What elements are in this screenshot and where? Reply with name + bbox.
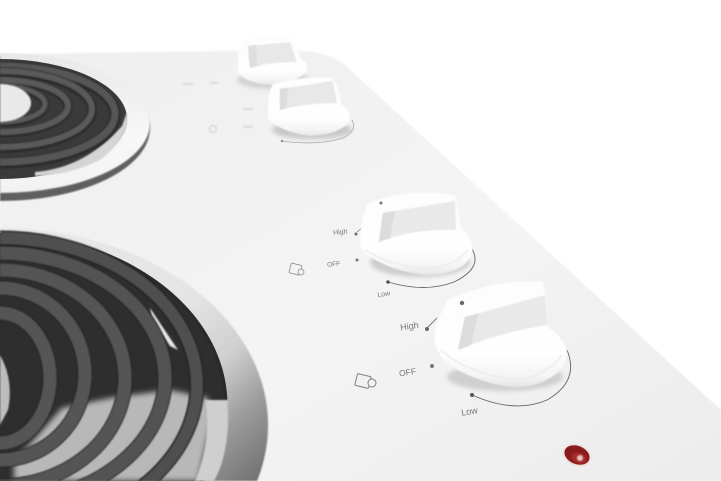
icon: [355, 373, 376, 389]
dial: High / OFF / Low knob 4: [355, 281, 571, 418]
dial: High / OFF / Low knob 4: OFF: [398, 366, 417, 378]
burner: rear left coil: [0, 53, 150, 201]
rear burner chrome ring: [0, 55, 150, 201]
front burner chrome ring: [0, 228, 268, 481]
dial: High / OFF / Low knob 3: Low: [377, 290, 392, 299]
burner: front left coil: [0, 228, 268, 481]
knob body: [447, 363, 563, 391]
knob body: [370, 247, 470, 277]
power indicator light: [560, 440, 594, 470]
dial 3 arc: [388, 249, 475, 288]
rear burner coils: [0, 66, 115, 163]
front burner coils: [0, 230, 204, 481]
front burner well: [0, 233, 227, 481]
icon: [289, 263, 304, 275]
faint rear controls and icon: [183, 82, 253, 132]
rear burner well: [0, 59, 127, 179]
dial: rear knob 2: [268, 78, 354, 143]
front burner centre hub: [0, 355, 10, 425]
rear burner centre disc: [0, 84, 31, 122]
dial: High / OFF / Low knob 3: [289, 193, 475, 299]
dial: High / OFF / Low knob 3: OFF: [327, 260, 341, 269]
dial: rear knob 1: [237, 35, 309, 89]
dial: High / OFF / Low knob 4: Low: [460, 405, 479, 418]
labels: High: [400, 320, 419, 332]
chrome reflection in well: [14, 390, 212, 481]
labels: High: [333, 228, 348, 237]
dial 2 arc: [282, 120, 354, 143]
dial 4 arc: [472, 350, 571, 406]
